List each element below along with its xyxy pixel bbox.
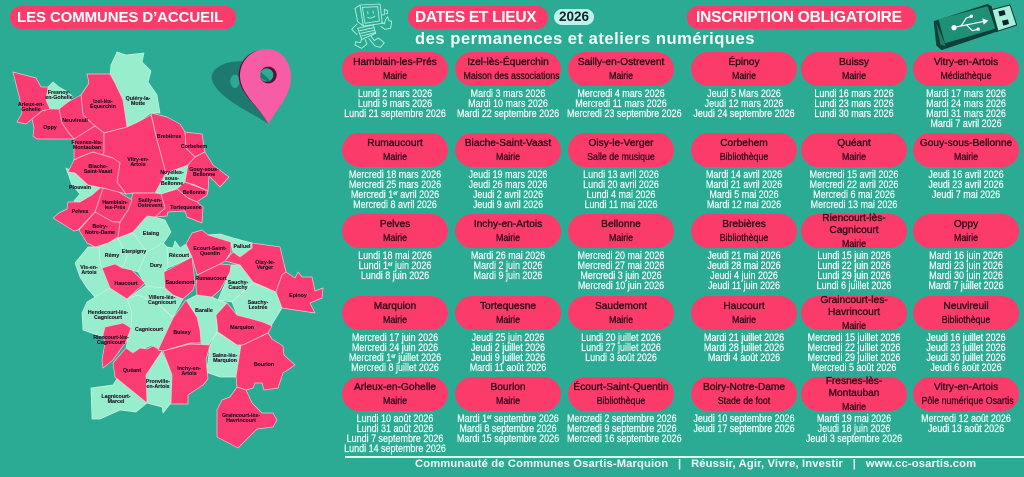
panel: Marquion: Mairie <box>383 314 407 326</box>
panel: Riencourt-lès-Cagnicourt <box>801 213 907 292</box>
panel: Neuvireuil: Jeudi 23 juillet 2026 <box>926 342 1006 354</box>
panel: Rumaucourt: Mercredi 18 mars 2026 <box>349 169 441 181</box>
panel: Biache-Saint-Vaast: Jeudi 2 avril 2026 <box>473 189 543 201</box>
panel: Écourt-Saint-Quentin: Bibliothèque <box>597 394 645 406</box>
panel: Buissy: Buissy <box>839 57 869 68</box>
panel: Riencourt-lès-Cagnicourt: Mairie <box>842 238 866 250</box>
commune labels: Biache- <box>88 164 108 170</box>
commune labels: Neuvireuil <box>62 118 88 124</box>
panel: Rumaucourt: Mercredi 8 avril 2026 <box>353 199 437 211</box>
panel: Écourt-Saint-Quentin: Mercredi 2 septembre 2026 <box>567 413 677 425</box>
panel: Buissy: Lundi 16 mars 2026 <box>814 88 894 100</box>
panel: Saudemont: Lundi 3 août 2026 <box>585 352 657 364</box>
commune labels: Oppy <box>43 125 57 131</box>
panel: Biache-Saint-Vaast: Jeudi 9 avril 2026 <box>473 199 543 211</box>
panel: Brebières: Jeudi 21 mai 2026 <box>707 250 781 262</box>
panel: Rumaucourt <box>342 133 448 211</box>
commune labels: Brebières <box>157 134 181 140</box>
panel: Buissy: Lundi 30 mars 2026 <box>814 108 894 120</box>
commune labels: Cauchy <box>228 285 248 291</box>
panel: Gouy-sous-Bellonne: Gouy-sous-Bellonne <box>920 138 1012 149</box>
panel: Oisy-le-Verger: Lundi 4 mai 2026 <box>587 189 655 201</box>
panel: Tortequesne: Jeudi 2 juillet 2026 <box>471 342 545 354</box>
panel: Izel-lès-Équerchin: Mardi 22 septembre 2026 <box>457 108 559 120</box>
map of communes <box>12 52 324 448</box>
panel: Riencourt-lès-Cagnicourt: Riencourt-lès- <box>822 213 886 224</box>
panel: Arleux-en-Gohelle: Mairie <box>383 394 407 406</box>
panel: Quéant: Mairie <box>842 150 866 162</box>
panel: Oisy-le-Verger: Lundi 20 avril 2026 <box>583 179 659 191</box>
commune labels: Cagnicourt <box>148 300 176 306</box>
heading: dates et lieux <box>408 6 548 29</box>
panel: Marquion: Marquion <box>374 301 416 312</box>
panel: Izel-lès-Équerchin: Mardi 3 mars 2026 <box>471 88 545 100</box>
commune labels: Fresnoy- <box>48 90 70 96</box>
panel: Saudemont <box>568 296 674 364</box>
panel: Saudemont: Lundi 20 juillet 2026 <box>581 332 661 344</box>
commune labels: Buissy <box>173 330 191 336</box>
panel: Saudemont: Mairie <box>609 314 633 326</box>
panel: Bellonne: Bellonne <box>601 219 641 230</box>
commune labels: Rémy <box>105 253 119 259</box>
commune labels: Hamblain- <box>102 200 128 206</box>
commune labels: Quéant <box>123 368 141 374</box>
panel: Écourt-Saint-Quentin: Mercredi 9 septembre 2026 <box>567 423 677 435</box>
panel: Sailly-en-Ostrevent: Sailly-en-Ostrevent <box>578 57 664 68</box>
commune labels: Ecourt-Saint- <box>193 246 227 252</box>
panel: Marquion: Mercredi 8 juillet 2026 <box>351 362 439 374</box>
heading: inscription obligatoire <box>687 6 916 29</box>
pink communes <box>13 72 323 448</box>
commune labels: Epinoy <box>289 293 307 299</box>
commune labels: Saint-Vaast <box>84 169 113 175</box>
heading: inscription obligatoire: INSCRIPTION OBLIGATOIRE <box>696 9 902 26</box>
commune labels: Équerchin <box>90 102 116 110</box>
commune labels: Vitry-en- <box>127 157 149 163</box>
panel: Neuvireuil: Neuvireuil <box>943 301 989 312</box>
panel: Quéant <box>801 133 907 211</box>
panel: Riencourt-lès-Cagnicourt: Lundi 29 juin 2026 <box>817 270 891 282</box>
panel: Fresnes-lès-Montauban: Fresnes-lès- <box>826 376 882 387</box>
panel: Oisy-le-Verger: Salle de musique <box>587 150 655 162</box>
commune labels: Havrincourt <box>226 418 256 424</box>
panel: Vitry-en-Artois pôle numérique: Vitry-en-Artois <box>934 382 998 393</box>
panel: Corbehem: Mardi 14 avril 2026 <box>706 169 782 181</box>
commune labels: Tortequesne <box>170 205 202 211</box>
commune labels: sous- <box>165 176 179 182</box>
commune labels: Récourt <box>169 253 189 259</box>
commune labels: Cagnicourt <box>94 315 122 321</box>
panel: Tortequesne: Jeudi 9 juillet 2026 <box>471 352 545 364</box>
panel: Boiry-Notre-Dame: Stade de foot <box>718 394 770 406</box>
panel: Graincourt-lès-Havrincourt: Mercredi 5 août 2026 <box>812 362 896 374</box>
panel: Saudemont: Saudemont <box>595 301 647 312</box>
panel: Vitry-en-Artois pôle numérique: Pôle numérique Osartis <box>921 394 1014 406</box>
panel: Vitry-en-Artois médiathèque: Mardi 31 mars 2026 <box>926 108 1006 120</box>
panel: Corbehem: Bibliothèque <box>720 150 768 162</box>
panel: Haucourt: Mardi 28 juillet 2026 <box>704 342 784 354</box>
panel: Bourlon: Mardi 1er septembre 2026 <box>457 413 559 425</box>
panel: Fresnes-lès-Montauban <box>801 376 907 445</box>
panel: Quéant: Mercredi 6 mai 2026 <box>813 189 895 201</box>
panel: Izel-lès-Équerchin: Izel-lès-Équerchin <box>467 57 549 68</box>
panel: Épinoy: Jeudi 5 Mars 2026 <box>707 88 781 100</box>
panel: Hamblain-les-Prés: Hamblain-les-Prés <box>353 57 437 68</box>
heading: les communes d'accueil: LES COMMUNES D’ACCUEIL <box>17 9 223 26</box>
panel: Gouy-sous-Bellonne: Jeudi 23 avril 2026 <box>928 179 1004 191</box>
panel: Brebières: Jeudi 11 juin 2026 <box>708 280 780 292</box>
panel: Oppy: Mardi 30 juin 2026 <box>929 270 1003 282</box>
panel: Buissy: Lundi 23 mars 2026 <box>814 98 894 110</box>
commune labels: Artois <box>81 270 97 276</box>
commune labels: Noyelles- <box>160 170 184 176</box>
commune labels: Verger <box>257 265 273 271</box>
panel: Vitry-en-Artois pôle numérique <box>913 377 1019 435</box>
commune labels: Eterpigny <box>122 249 146 255</box>
commune labels: Rumaucourt <box>195 276 227 282</box>
commune labels: Marquion <box>213 358 237 364</box>
panel: Haucourt: Mairie <box>732 314 756 326</box>
panel: Neuvireuil <box>913 296 1019 374</box>
commune labels: Haucourt <box>114 281 138 287</box>
commune labels: Palluel <box>233 244 251 250</box>
commune labels: Lagnicourt- <box>101 394 131 400</box>
panel: Inchy-en-Artois <box>455 214 561 282</box>
panel: Fresnes-lès-Montauban: Mardi 19 mai 2026 <box>817 413 891 425</box>
panel: Oppy: Mardi 16 juin 2026 <box>929 250 1003 262</box>
panel: Rumaucourt: Mercredi 25 mars 2026 <box>349 179 441 191</box>
panel: Boiry-Notre-Dame: Jeudi 10 septembre 2026 <box>693 413 795 425</box>
panel: Quéant: Mercredi 13 mai 2026 <box>811 199 897 211</box>
panel: Graincourt-lès-Havrincourt: Graincourt-les- <box>820 295 888 306</box>
panel: Bellonne: Mairie <box>609 232 633 244</box>
panel: Riencourt-lès-Cagnicourt: Lundi 15 juin 2026 <box>817 250 891 262</box>
panel: Vitry-en-Artois médiathèque <box>913 52 1019 130</box>
panel: Rumaucourt: Mercredi 1er avril 2026 <box>351 189 439 201</box>
commune labels: Oisy-le- <box>255 260 275 266</box>
panel: Bellonne: Mercredi 27 mai 2026 <box>578 260 664 272</box>
commune labels: Sauchy- <box>228 280 249 286</box>
panel: Écourt-Saint-Quentin <box>567 377 682 445</box>
panel: Brebières: Jeudi 4 juin 2026 <box>710 270 778 282</box>
panel: Tortequesne: Tortequesne <box>480 301 536 312</box>
icon: walking computer mascot <box>351 4 392 49</box>
commune labels: Lestrée <box>249 305 267 311</box>
panel: Corbehem: Corbehem <box>720 138 768 149</box>
panel: Saudemont: Lundi 27 juillet 2026 <box>581 342 661 354</box>
icon: usb key <box>934 4 1018 50</box>
panel: Corbehem: Mardi 21 avril 2026 <box>706 179 782 191</box>
commune labels: Vis-en- <box>80 265 98 271</box>
panel: Tortequesne: Mairie <box>496 314 520 326</box>
panel: Marquion <box>342 296 448 374</box>
panel: Izel-lès-Équerchin <box>455 52 561 120</box>
panel: Marquion: Mercredi 17 juin 2026 <box>352 332 438 344</box>
panel: Sailly-en-Ostrevent: Mercredi 23 septembre 2026 <box>567 108 682 120</box>
panel: Épinoy: Jeudi 12 mars 2026 <box>705 98 783 110</box>
panel: Vitry-en-Artois médiathèque: Mardi 17 mars 2026 <box>926 88 1006 100</box>
commune labels: Graincourt-lès- <box>222 413 260 419</box>
panel: Graincourt-lès-Havrincourt: Mairie <box>842 320 866 332</box>
panel: Vitry-en-Artois pôle numérique: Mercredi 12 août 2026 <box>921 413 1011 425</box>
commune labels: Montauban <box>73 145 101 151</box>
panel: Écourt-Saint-Quentin: Mercredi 16 septembre 2026 <box>567 433 682 445</box>
panel: Neuvireuil: Jeudi 30 juillet 2026 <box>926 352 1006 364</box>
panel: Graincourt-lès-Havrincourt <box>801 295 907 374</box>
panel: Fresnes-lès-Montauban: Jeudi 18 juin 2026 <box>818 423 890 435</box>
panel: Oisy-le-Verger: Lundi 11 mai 2026 <box>584 199 658 211</box>
commune labels: Gohelle <box>21 107 41 113</box>
commune labels: Fresnes-lès- <box>71 140 103 146</box>
panel: Graincourt-lès-Havrincourt: Mercredi 15 juillet 2026 <box>808 332 900 344</box>
panel: Neuvireuil: Jeudi 16 juillet 2026 <box>926 332 1006 344</box>
commune labels: Quiéry-la- <box>126 96 151 102</box>
heading: dates et lieux: DATES ET LIEUX <box>415 9 536 26</box>
panel: Épinoy: Mairie <box>732 70 756 82</box>
panel: Bourlon: Mairie <box>496 394 520 406</box>
commune labels: Sains-lès- <box>212 353 238 359</box>
commune labels: Artois <box>130 162 146 168</box>
panel: Écourt-Saint-Quentin: Écourt-Saint-Quentin <box>573 382 669 393</box>
panel: Rumaucourt: Rumaucourt <box>367 138 423 149</box>
panel: Fresnes-lès-Montauban: Jeudi 3 septembre 2026 <box>806 433 902 445</box>
panel: Pelves: Lundi 18 mai 2026 <box>358 250 432 262</box>
panel: Hamblain-les-Prés: Mairie <box>383 70 407 82</box>
panel: Vitry-en-Artois médiathèque: Vitry-en-Artois <box>934 57 998 68</box>
panel: Bourlon: Mardi 8 septembre 2026 <box>459 423 557 435</box>
panel: Inchy-en-Artois: Mardi 9 juin 2026 <box>474 270 542 282</box>
commune labels: Bellonne <box>193 172 215 178</box>
footer text: Communauté de Communes Osartis-Marquion | Réussir, Agir, Vivre, Investir | www.cc-osartis.com <box>415 458 976 470</box>
panel: Gouy-sous-Bellonne: Jeudi 7 mai 2026 <box>932 189 1000 201</box>
panel: Arleux-en-Gohelle: Lundi 14 septembre 2026 <box>344 443 446 455</box>
panel: Fresnes-lès-Montauban: Montauban <box>828 388 879 399</box>
panel: Épinoy <box>691 52 797 120</box>
commune labels: Bellonne <box>183 190 205 196</box>
panel: Buissy <box>801 52 907 120</box>
panel: Vitry-en-Artois médiathèque: Mardi 7 avril 2026 <box>930 118 1002 130</box>
panel: Quéant: Mercredi 22 avril 2026 <box>810 179 898 191</box>
commune labels: Villers-lès- <box>149 295 176 301</box>
panel: Hamblain-les-Prés: Lundi 9 mars 2026 <box>358 98 432 110</box>
commune labels: en-Artois <box>146 384 170 390</box>
panel: Biache-Saint-Vaast: Jeudi 26 mars 2026 <box>469 179 547 191</box>
commune labels: Boiry- <box>92 224 108 230</box>
commune labels: Gouy-sous- <box>189 167 219 173</box>
panel: Haucourt: Haucourt <box>723 301 765 312</box>
commune labels: Saudemont <box>166 280 195 286</box>
commune labels: Motte <box>131 101 145 107</box>
panel: Riencourt-lès-Cagnicourt: Lundi 22 juin 2026 <box>817 260 891 272</box>
panel: Fresnes-lès-Montauban: Mairie <box>842 400 866 412</box>
panel: Neuvireuil: Bibliothèque <box>942 314 990 326</box>
commune labels: Marcel <box>108 399 125 405</box>
panel: Arleux-en-Gohelle <box>342 377 448 455</box>
icon: map pin <box>212 49 291 124</box>
panel: Sailly-en-Ostrevent: Mercredi 4 mars 2026 <box>577 88 665 100</box>
panel: Marquion: Mercredi 24 juin 2026 <box>352 342 438 354</box>
panel: Brebières: Bibliothèque <box>720 232 768 244</box>
commune labels: Etaing <box>143 231 159 237</box>
panel: Neuvireuil: Jeudi 6 août 2026 <box>930 362 1002 374</box>
panel: Haucourt <box>691 296 797 364</box>
panel: Oppy: Mardi 7 juillet 2026 <box>928 280 1004 292</box>
panel: Hamblain-les-Prés: Lundi 2 mars 2026 <box>358 88 432 100</box>
commune labels: Cagnicourt <box>97 340 125 346</box>
panel: Pelves: Lundi 8 juin 2026 <box>361 270 429 282</box>
panel: Tortequesne: Jeudi 25 juin 2026 <box>472 332 544 344</box>
commune labels: Arleux-en- <box>18 102 44 108</box>
panel: Bourlon: Mardi 15 septembre 2026 <box>457 433 559 445</box>
panel: Sailly-en-Ostrevent <box>567 52 682 120</box>
panel: Vitry-en-Artois médiathèque: Mardi 24 mars 2026 <box>926 98 1006 110</box>
panel: Arleux-en-Gohelle: Lundi 31 août 2026 <box>357 423 433 435</box>
commune labels: Marquion <box>230 325 254 331</box>
panel: Arleux-en-Gohelle: Lundi 7 septembre 2026 <box>347 433 443 445</box>
panel: Rumaucourt: Mairie <box>383 150 407 162</box>
commune labels <box>18 90 307 424</box>
panel: Buissy: Mairie <box>842 70 866 82</box>
commune labels: Riencourt-lès- <box>93 335 129 341</box>
commune labels: Sauchy- <box>248 300 269 306</box>
year badge: 2026 <box>559 9 589 24</box>
panel: Bourlon: Bourlon <box>490 382 526 393</box>
mint communes <box>46 52 282 419</box>
panel: Gouy-sous-Bellonne: Mairie <box>954 150 978 162</box>
panel: Oppy: Oppy <box>954 219 978 230</box>
panel: Brebières <box>691 214 797 292</box>
panel: Corbehem: Mardi 12 mai 2026 <box>707 199 781 211</box>
panel: Bellonne: Mercredi 20 mai 2026 <box>578 250 664 262</box>
commune labels: Quentin <box>200 251 220 257</box>
commune labels: Notre-Dame <box>85 230 115 236</box>
panel: Inchy-en-Artois: Mardi 26 mai 2026 <box>471 250 545 262</box>
panel: Arleux-en-Gohelle: Arleux-en-Gohelle <box>354 382 436 393</box>
panel: Oisy-le-Verger: Lundi 13 avril 2026 <box>583 169 659 181</box>
panel: Corbehem <box>691 133 797 211</box>
panel: Vitry-en-Artois pôle numérique: Jeudi 13 août 2026 <box>928 423 1004 435</box>
commune labels: Corbehem <box>181 144 207 150</box>
panel: Biache-Saint-Vaast: Mairie <box>496 150 520 162</box>
panel: Épinoy: Jeudi 24 septembre 2026 <box>693 108 795 120</box>
commune labels: Artois <box>181 371 197 377</box>
commune labels: Izel-lès- <box>93 99 113 105</box>
commune labels: Plouvain <box>69 185 91 191</box>
heading: les communes d'accueil <box>10 6 236 29</box>
panel: Haucourt: Mardi 21 juillet 2026 <box>704 332 784 344</box>
panel: Biache-Saint-Vaast <box>455 133 561 211</box>
panel: Izel-lès-Équerchin: Maison des associations <box>463 70 560 82</box>
panel: Pelves: Pelves <box>380 219 410 230</box>
panel: Izel-lès-Équerchin: Mardi 10 mars 2026 <box>468 98 548 110</box>
panel: Graincourt-lès-Havrincourt: Mercredi 22 juillet 2026 <box>808 342 900 354</box>
panel: Tortequesne <box>455 296 561 374</box>
panel: Boiry-Notre-Dame: Jeudi 17 septembre 2026 <box>693 423 795 435</box>
panel: Marquion: Mercredi 1er juillet 2026 <box>349 352 441 364</box>
panel: Brebières: Jeudi 28 mai 2026 <box>707 260 781 272</box>
panel: Épinoy: Épinoy <box>728 57 760 68</box>
panel: Tortequesne: Mardi 11 août 2026 <box>470 362 546 374</box>
commune labels: Baralle <box>195 308 213 314</box>
panel: Inchy-en-Artois: Inchy-en-Artois <box>474 219 542 230</box>
panel: Pelves: Lundi 1er juin 2026 <box>359 260 431 272</box>
commune labels: Sailly-en- <box>138 198 162 204</box>
panel: Biache-Saint-Vaast: Biache-Saint-Vaast <box>465 138 551 149</box>
commune labels: Bourlon <box>254 362 274 368</box>
panel: Riencourt-lès-Cagnicourt: Cagnicourt <box>829 225 879 236</box>
commune labels: Hendecourt-lès- <box>88 310 128 316</box>
panel: Pelves: Mairie <box>383 232 407 244</box>
panel: Oppy: Mardi 23 juin 2026 <box>929 260 1003 272</box>
subtitle: des permanences et ateliers numériques <box>415 29 755 48</box>
commune labels: Cagnicourt <box>135 327 163 333</box>
panel: Oppy: Mairie <box>954 232 978 244</box>
panel: Bourlon <box>455 377 561 445</box>
panel: Boiry-Notre-Dame: Boiry-Notre-Dame <box>703 382 785 393</box>
panel: Graincourt-lès-Havrincourt: Mercredi 29 juillet 2026 <box>808 352 900 364</box>
panel: Riencourt-lès-Cagnicourt: Lundi 6 juillet 2026 <box>817 280 891 292</box>
panel: Sailly-en-Ostrevent: Mairie <box>609 70 633 82</box>
panel: Haucourt: Mardi 4 août 2026 <box>708 352 780 364</box>
panel: Hamblain-les-Prés <box>342 52 448 120</box>
panel: Oisy-le-Verger: Oisy-le-Verger <box>588 138 654 149</box>
panel: Oppy <box>913 214 1019 292</box>
panel: Bellonne: Mercredi 3 juin 2026 <box>580 270 662 282</box>
panel: Quéant: Mercredi 15 avril 2026 <box>810 169 898 181</box>
panel: Brebières: Brebières <box>722 219 766 230</box>
panel: Corbehem: Mardi 5 mai 2026 <box>709 189 779 201</box>
commune labels: Dury <box>150 263 162 269</box>
panel: Hamblain-les-Prés: Lundi 21 septembre 2026 <box>344 108 446 120</box>
panel: Inchy-en-Artois: Mairie <box>496 232 520 244</box>
commune labels: Pronville- <box>146 379 170 385</box>
panel: Gouy-sous-Bellonne: Jeudi 16 avril 2026 <box>928 169 1004 181</box>
commune labels: Ostrevent <box>138 203 163 209</box>
panel: Quéant: Quéant <box>837 138 871 149</box>
panel: Gouy-sous-Bellonne <box>913 133 1019 201</box>
panel: Arleux-en-Gohelle: Lundi 10 août 2026 <box>357 413 433 425</box>
panel: Bellonne: Mercredi 10 juin 2026 <box>578 280 664 292</box>
panel: Sailly-en-Ostrevent: Mercredi 11 mars 2026 <box>575 98 667 110</box>
panel: Vitry-en-Artois médiathèque: Médiathèque <box>940 70 992 82</box>
panel: Bellonne <box>568 214 674 292</box>
commune labels: Bellonne <box>161 181 183 187</box>
panel: Inchy-en-Artois: Mardi 2 juin 2026 <box>474 260 542 272</box>
panel: Pelves <box>342 214 448 282</box>
panel: Biache-Saint-Vaast: Jeudi 19 mars 2026 <box>469 169 547 181</box>
panel: Graincourt-lès-Havrincourt: Havrincourt <box>828 307 880 318</box>
panel: Boiry-Notre-Dame <box>691 377 797 435</box>
commune labels: Inchy-en- <box>177 366 201 372</box>
commune labels: en-Gohelle <box>45 95 73 101</box>
commune labels: Pelves <box>72 209 88 215</box>
commune labels: les-Prés <box>105 205 125 211</box>
panel: Oisy-le-Verger <box>568 133 674 211</box>
